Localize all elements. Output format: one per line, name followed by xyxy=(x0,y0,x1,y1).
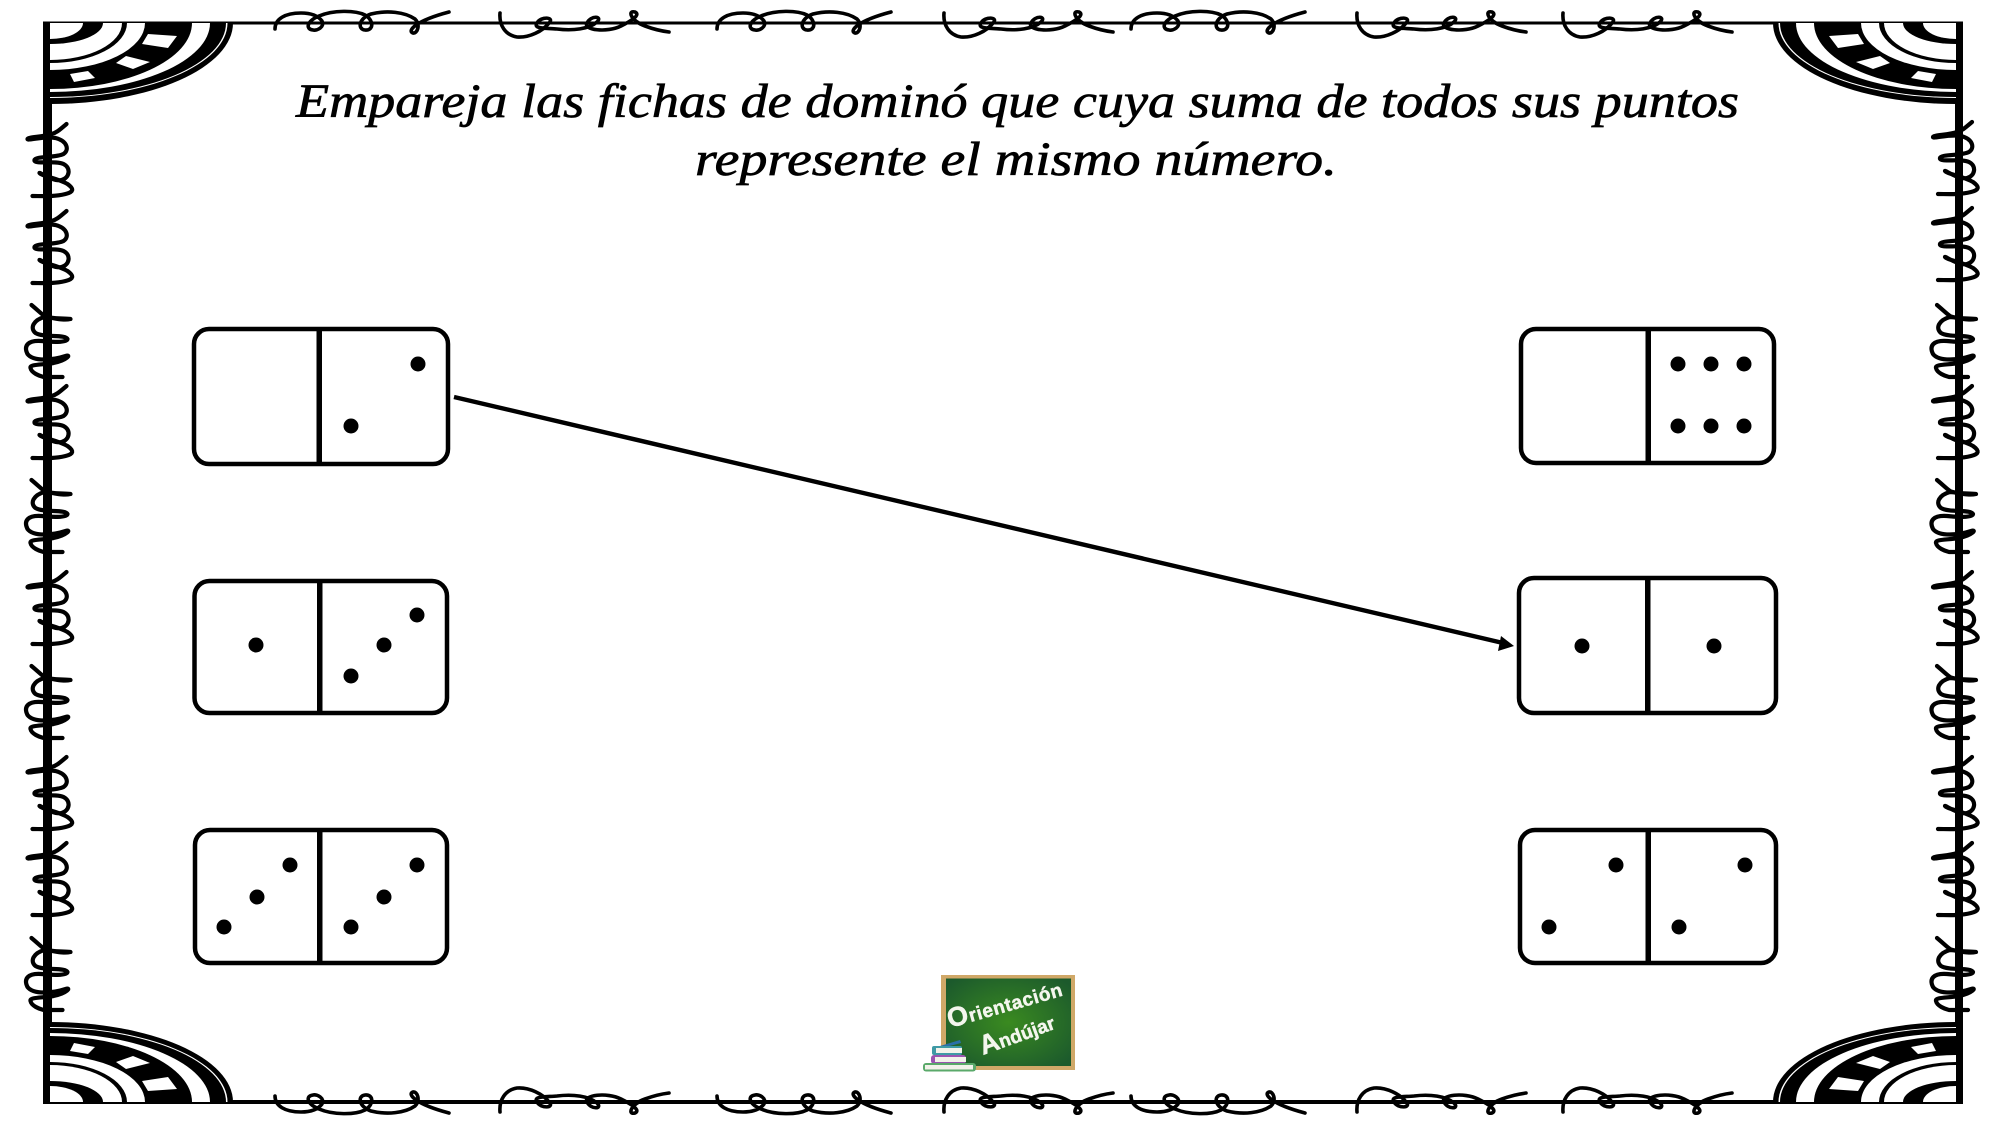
corner ornament: bottom left xyxy=(50,1022,233,1102)
domino left 1: blank and 2 xyxy=(194,329,448,464)
domino left 2: 1 and 3 xyxy=(194,581,447,713)
logo books xyxy=(923,1040,976,1072)
arrow: example match xyxy=(454,397,1514,651)
logo text: Orientación xyxy=(943,972,1065,1034)
left border squiggles xyxy=(26,124,72,1010)
logo text: Andújar xyxy=(975,1006,1059,1061)
bottom border squiggles xyxy=(275,1088,1732,1114)
top border squiggles xyxy=(275,11,1732,37)
logo: Orientación Andújar chalkboard xyxy=(923,972,1075,1072)
corner ornament: top left xyxy=(50,23,233,104)
right border squiggles xyxy=(1932,122,1978,1010)
domino right 1: blank and 6 xyxy=(1521,329,1774,463)
domino right 2: 1 and 1 xyxy=(1519,578,1776,713)
title: Empareja las fichas de dominó que cuya suma de todos sus puntos xyxy=(295,75,1739,128)
logo text xyxy=(943,972,1065,1061)
corner ornament: bottom right xyxy=(1773,1022,1956,1102)
title: represente el mismo número. xyxy=(695,133,1337,186)
title xyxy=(295,75,1739,186)
corner ornament: top right xyxy=(1773,23,1956,104)
domino left 3: 3 and 3 xyxy=(195,830,447,963)
domino right 3: 2 and 2 xyxy=(1520,830,1776,963)
